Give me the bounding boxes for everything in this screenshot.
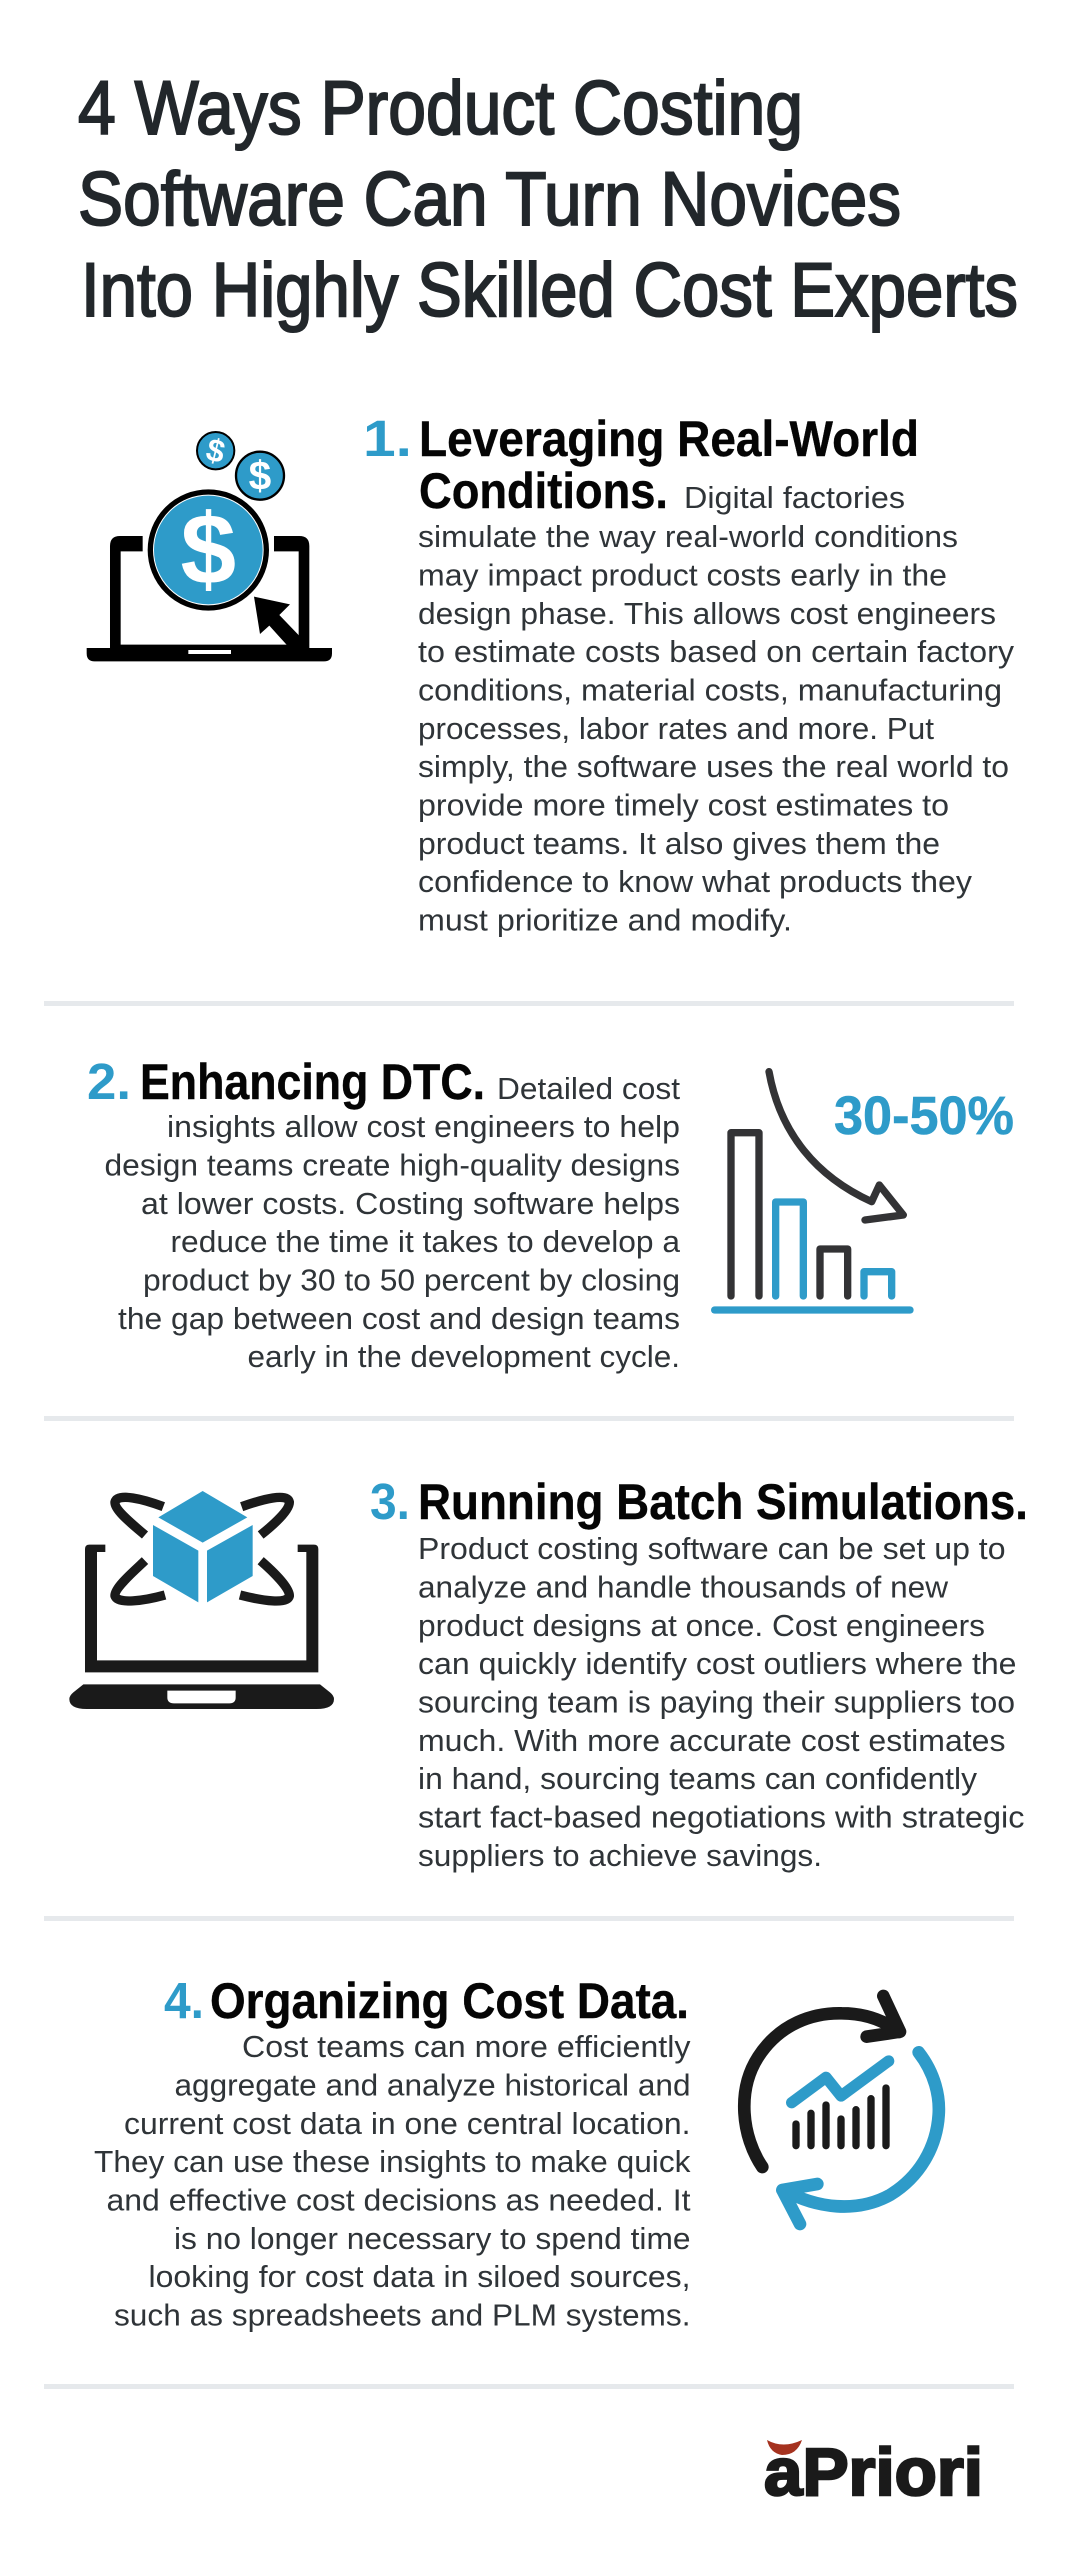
body text: Cost teams can more efficiently [242, 2029, 691, 2064]
body text: can quickly identify cost outliers where the [418, 1646, 1016, 1681]
heading number: 3. [370, 1473, 410, 1530]
body text: looking for cost data in siloed sources, [148, 2259, 690, 2294]
icon: laptop with dollar coins and cursor: $ [249, 452, 272, 498]
body text: design teams create high-quality designs [104, 1148, 680, 1182]
body text: Product costing software can be set up to [418, 1531, 1006, 1566]
heading number: 2. [87, 1053, 131, 1110]
body text: reduce the time it takes to develop a [170, 1224, 681, 1259]
body text: is no longer necessary to spend time [174, 2221, 690, 2256]
body text: at lower costs. Costing software helps [141, 1186, 680, 1221]
heading: Organizing Cost Data. [210, 1973, 689, 2029]
body text [418, 1531, 1024, 1873]
icon: declining bar chart with arrow [715, 1072, 910, 1310]
heading number: 4. [164, 1972, 204, 2029]
body text: suppliers to achieve savings. [418, 1838, 822, 1873]
icon: laptop with dollar coins and cursor [87, 431, 332, 661]
body text: insights allow cost engineers to help [167, 1109, 680, 1144]
body text: such as spreadsheets and PLM systems. [114, 2298, 690, 2332]
callout: 30-50%: 30-50% [834, 1086, 1014, 1146]
heading: Conditions. [419, 463, 668, 519]
body text [94, 2029, 691, 2332]
panel: 2 enhancing DTC [87, 1053, 1014, 1374]
body text: Digital factories [684, 480, 905, 515]
icon: laptop with dollar coins and cursor: $ [203, 431, 229, 470]
panel: 4 organizing cost data [94, 1972, 939, 2332]
body text: design phase. This allows cost engineers [418, 596, 996, 631]
body text: simulate the way real-world conditions [418, 519, 958, 554]
icon: circular arrows around chart [744, 1996, 939, 2224]
body text: Detailed cost [497, 1071, 680, 1106]
body text: analyze and handle thousands of new [418, 1570, 949, 1604]
title: 4 Ways Product Costing [78, 66, 803, 151]
body text: in hand, sourcing teams can confidently [418, 1761, 978, 1796]
body text: and effective cost decisions as needed. It [106, 2182, 691, 2218]
heading: Running Batch Simulations. [418, 1474, 1028, 1530]
panel: 3 running batch simulations [69, 1473, 1028, 1873]
heading: Enhancing DTC. [140, 1054, 485, 1110]
body text: aggregate and analyze historical and [174, 2068, 690, 2102]
body text: start fact-based negotiations with strategic [418, 1800, 1024, 1834]
body text: product by 30 to 50 percent by closing [143, 1262, 680, 1298]
body text: product teams. It also gives them the [418, 826, 940, 861]
body text: sourcing team is paying their suppliers too [418, 1684, 1015, 1720]
body text: the gap between cost and design teams [118, 1301, 680, 1336]
body text [418, 480, 1015, 938]
body text: They can use these insights to make quick [94, 2144, 691, 2179]
body text: conditions, material costs, manufacturing [418, 672, 1002, 708]
body text: provide more timely cost estimates to [418, 788, 949, 822]
body text: current cost data in one central location. [124, 2106, 690, 2141]
body text: product designs at once. Cost engineers [418, 1608, 985, 1643]
title: Software Can Turn Novices [78, 157, 901, 242]
body text [104, 1071, 681, 1374]
heading: Leveraging Real-World [419, 411, 919, 467]
body text: may impact product costs early in the [418, 558, 947, 592]
heading number: 1. [363, 410, 412, 467]
panel: 1 leveraging real-world conditions [87, 410, 1015, 938]
body text: much. With more accurate cost estimates [418, 1723, 1006, 1758]
body text: early in the development cycle. [248, 1339, 680, 1374]
body text: processes, labor rates and more. Put [418, 711, 934, 746]
logo: aPriori: aPriori [764, 2435, 983, 2510]
body text: to estimate costs based on certain factory [418, 634, 1015, 669]
heading [419, 411, 919, 519]
icon: laptop with dollar coins and cursor: $ [181, 493, 236, 605]
body text: simply, the software uses the real world to [418, 749, 1009, 784]
body text: confidence to know what products they [418, 864, 973, 899]
icon: laptop with cube and orbits [69, 1491, 334, 1709]
body text: must prioritize and modify. [418, 902, 792, 938]
title [78, 66, 1018, 333]
